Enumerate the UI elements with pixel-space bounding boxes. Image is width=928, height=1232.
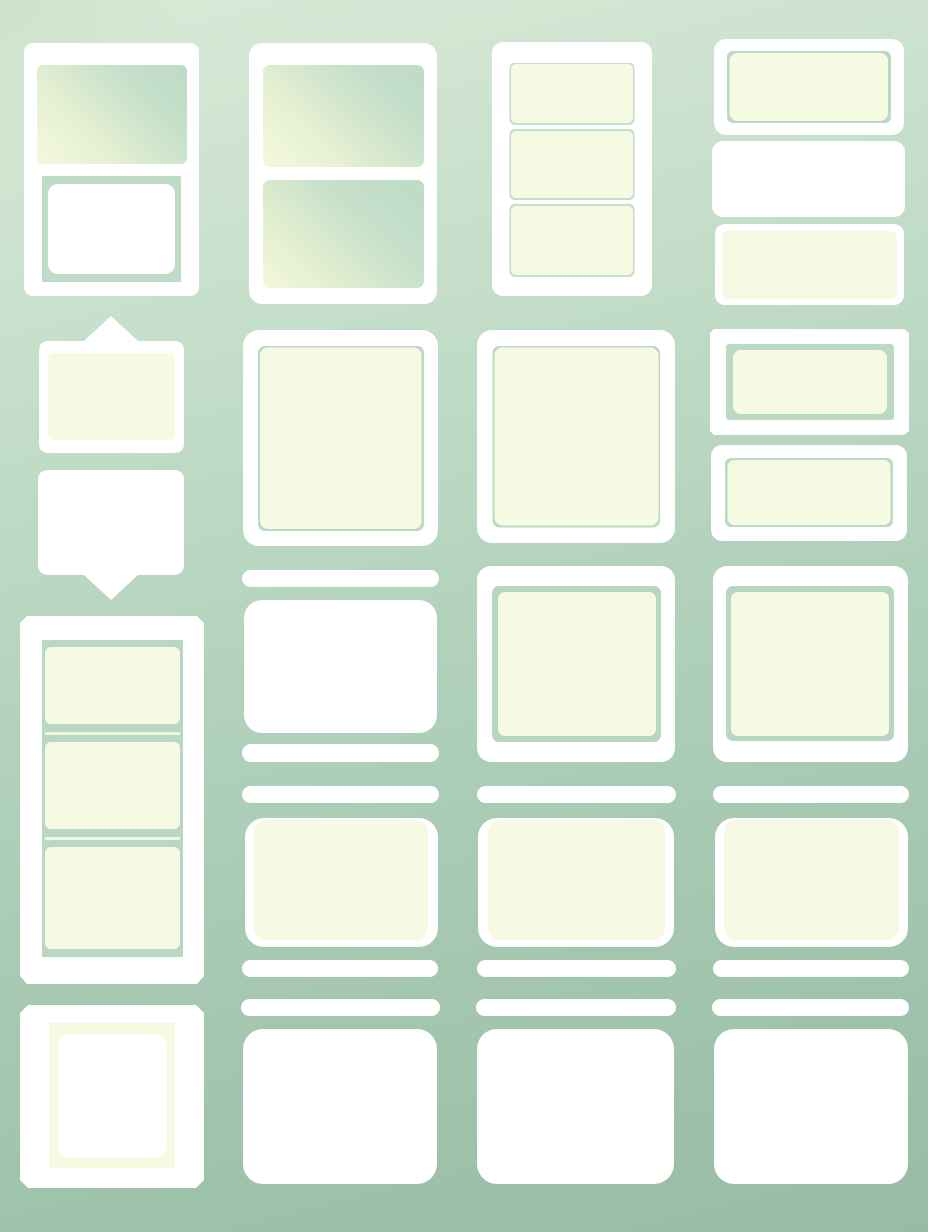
bar: column 3 row 4 top <box>477 786 676 803</box>
panel: column 2 large card <box>243 330 438 546</box>
bar: column 2 row 4 top <box>242 786 439 803</box>
bar: column 2 row 3 top <box>242 570 439 587</box>
inner white tile <box>58 1034 167 1158</box>
panel: column 1 bottom card <box>20 1005 204 1188</box>
panel: column 3 card 1 <box>492 42 652 296</box>
panel: column 4 white bar <box>712 141 905 217</box>
panel: column 4 square card <box>713 566 908 762</box>
inner tile <box>494 348 658 526</box>
panel: column 1 card 1 <box>24 43 199 296</box>
panel: column 4 bottom card <box>714 1029 908 1184</box>
bar: column 2 row 5 <box>241 999 440 1016</box>
inner tile <box>488 820 665 940</box>
inner tile <box>733 350 887 414</box>
panel: callout down arrow <box>38 470 184 600</box>
bar: column 4 row 4 bottom <box>713 960 909 977</box>
bar: column 3 row 4 bottom <box>477 960 676 977</box>
inner tile <box>724 820 899 940</box>
panel: column 3 square card <box>477 566 675 762</box>
panel: column 4 row 4 card <box>715 818 908 947</box>
bar: column 4 row 4 top <box>713 786 909 803</box>
framed white tile <box>42 176 181 282</box>
gradient tile top <box>263 65 424 167</box>
tile 2 <box>45 742 180 829</box>
inner tile <box>722 231 897 299</box>
divider 2 <box>45 837 180 840</box>
bar: column 2 row 3 bottom <box>242 744 439 762</box>
inner tile <box>260 348 422 529</box>
tile 3 <box>45 847 180 949</box>
inner tile <box>498 592 656 736</box>
inner tile <box>48 353 175 440</box>
bar: column 4 row 5 <box>712 999 909 1016</box>
gradient tile <box>37 65 187 164</box>
panel: callout up arrow <box>39 316 184 453</box>
panel: column 3 bottom card <box>477 1029 674 1184</box>
inner tile <box>254 820 428 940</box>
panel: column 3 large card <box>477 330 675 543</box>
divider 1 <box>45 732 180 735</box>
panel: column 4 card 4 <box>711 445 907 541</box>
panel: column 4 card 1 <box>714 39 904 135</box>
panel: column 2 bottom card <box>243 1029 437 1184</box>
inner tile <box>731 592 889 736</box>
panel: column 2 row 4 card <box>245 818 438 947</box>
panel: column 3 row 4 card <box>478 818 674 947</box>
inner tile <box>728 460 890 525</box>
tile 1 <box>45 647 180 724</box>
bar: column 3 row 5 <box>476 999 676 1016</box>
tile 1 <box>510 63 634 125</box>
inner tile <box>730 53 888 121</box>
panel: column 4 card 3 <box>710 329 909 435</box>
panel: column 2 white card <box>244 600 437 733</box>
tile 2 <box>510 129 634 200</box>
panel: column 2 card 1 <box>249 43 437 304</box>
panel: column 4 card 2 <box>715 224 904 305</box>
panel: column 1 tall card <box>20 616 204 984</box>
gradient tile bottom <box>263 180 424 288</box>
tile 3 <box>510 204 634 277</box>
bar: column 2 row 4 bottom <box>242 960 438 977</box>
